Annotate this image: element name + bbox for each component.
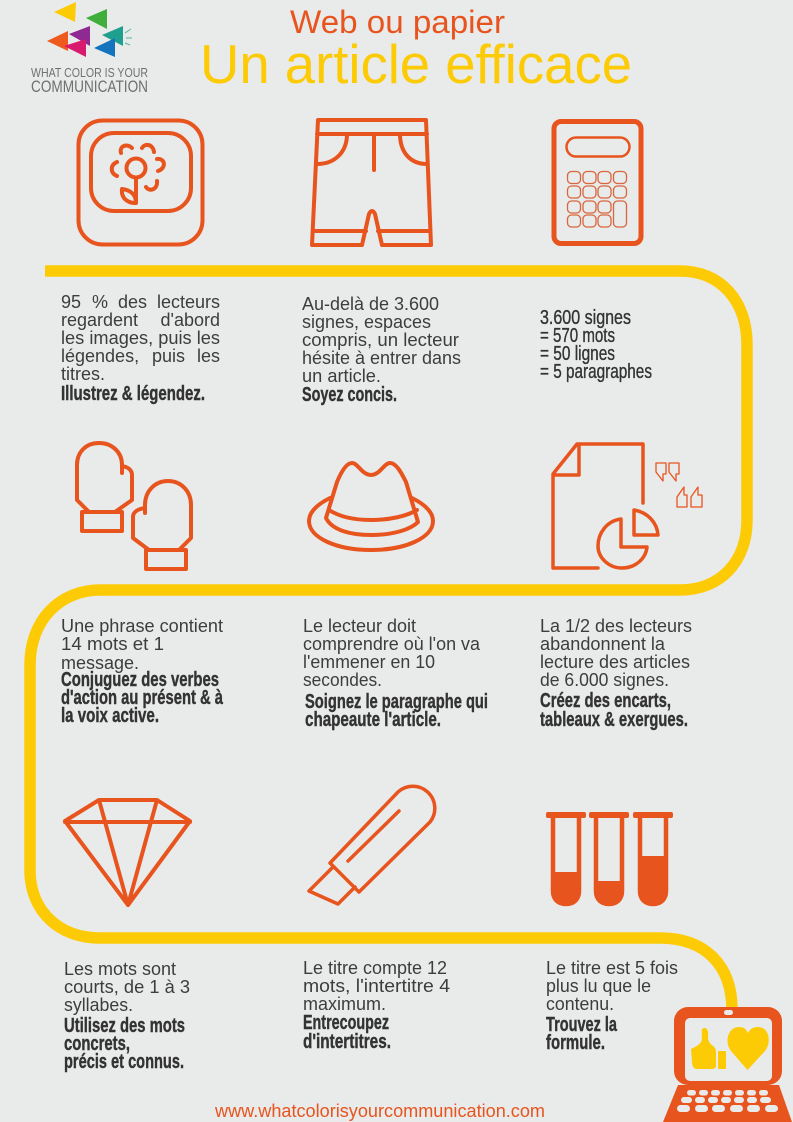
icon: shorts [312,120,431,245]
text: titles [303,958,450,1053]
text: opening: comprendre où l'on va [303,634,481,654]
footer url: www.whatcolorisyourcommunication.com [214,1101,545,1121]
text: length: compris, un lecteur [302,330,459,350]
text: length: un article. [302,366,381,386]
text: length [302,294,461,406]
text: sentences: d'action au présent & à [61,687,224,709]
text: titles: Le titre compte 12 [303,958,447,978]
text: images: titres. [61,364,105,384]
text: long articles: tableaux & exergues. [540,709,688,731]
icon: laptop with thumb and heart [663,1007,792,1122]
text: long articles: lecture des articles [540,652,690,672]
logo: COMMUNICATION [31,78,148,96]
text: opening: secondes. [303,670,382,690]
icon: mittens [77,443,191,569]
text: opening [303,616,488,731]
text: formula: formule. [546,1032,605,1054]
text: titles: d'intertitres. [303,1031,391,1053]
text: images [61,292,220,405]
text: opening: Le lecteur doit [303,616,416,636]
text: long articles: La 1/2 des lecteurs [540,616,692,636]
text: word count: = 50 lignes [540,343,615,365]
text: images: les [197,346,220,366]
text: words: syllabes. [64,995,133,1015]
icon: calculator [554,122,641,244]
yellow winding path [30,271,747,1010]
text: words: précis et connus. [64,1051,184,1073]
text: sentences: Une phrase contient [61,616,223,636]
text: formula: Trouvez la [546,1014,618,1036]
text: sentences: Conjuguez des verbes [61,669,219,691]
icon: hat [309,463,433,550]
text: opening: chapeaute l'article. [305,709,441,731]
text: formula: contenu. [546,994,614,1014]
subtitle: Web ou papier [290,3,505,40]
text: images: puis [152,346,185,366]
text: long articles [540,616,692,731]
text: length: signes, espaces [302,312,431,332]
text: length: Au-delà de 3.600 [302,294,439,314]
title: Un article efficace [200,34,632,95]
logo [31,2,148,96]
text: images: légendes, [61,346,139,366]
text: word count: 3.600 signes [540,307,631,329]
text: words [64,959,190,1073]
text: sentences: message. [61,653,139,673]
text: titles: Entrecoupez [303,1012,389,1034]
text: sentences: la voix active. [61,705,159,727]
text: word count: = 570 mots [540,325,615,347]
logo: WHAT COLOR IS YOUR [31,66,148,80]
icon: test tubes [546,812,673,906]
icon: diamond [65,800,190,905]
text: words: concrets, [64,1033,130,1055]
text: images: lecteurs [157,292,220,312]
text: sentences [61,616,224,727]
text: images: les images, puis les [61,328,220,348]
text: images: % [92,292,108,312]
text: length: hésite à entrer dans [302,348,461,368]
text: word count [540,307,652,383]
text: titles: mots, l'intertitre 4 [303,976,450,996]
text: words: Utilisez des mots [64,1015,185,1037]
text: long articles: abandonnent la [540,634,666,654]
text: sentences: 14 mots et 1 [61,634,164,654]
text: titles: maximum. [303,994,386,1014]
text: images: 95 [61,292,81,312]
icon: framed flower [78,120,202,244]
icon: cutter [309,786,435,904]
text: formula [546,958,678,1054]
text: opening: l'emmener en 10 [303,652,435,672]
text: opening: Soignez le paragraphe qui [305,691,488,713]
text: images: Illustrez & légendez. [61,383,205,405]
text: formula: plus lu que le [546,976,651,996]
icon: document with pie chart and quotes [553,444,702,568]
text: words: Les mots sont [64,959,176,979]
text: images: d'abord [161,310,220,330]
text: word count: = 5 paragraphes [540,361,652,383]
text: formula: Le titre est 5 fois [546,958,678,978]
text: long articles: Créez des encarts, [540,690,671,712]
text: images: des [118,292,147,312]
text: long articles: de 6.000 signes. [540,670,669,690]
text: words: courts, de 1 à 3 [64,977,190,997]
text: images: regardent [61,310,138,330]
text: length: Soyez concis. [302,384,397,406]
